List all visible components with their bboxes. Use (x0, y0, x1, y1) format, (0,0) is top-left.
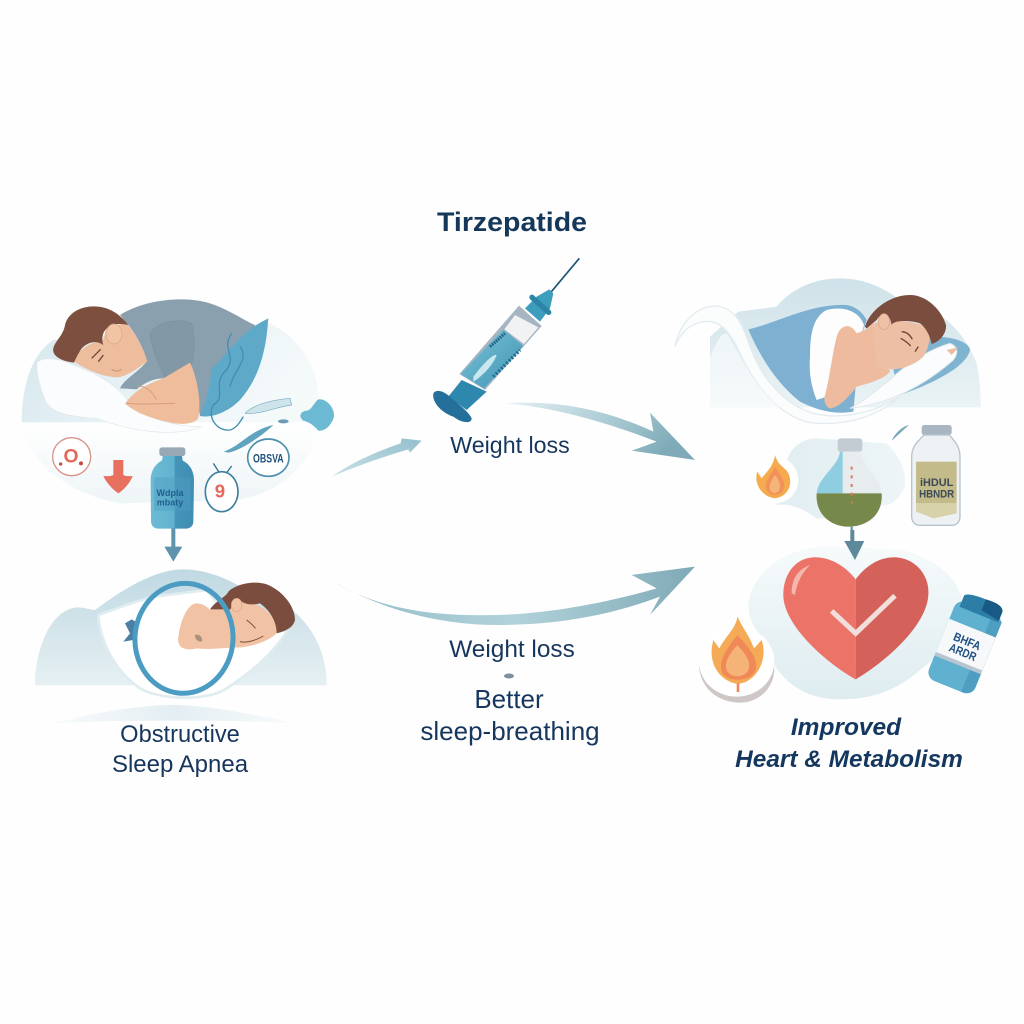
blue ring (130, 579, 238, 697)
icon: label badge: OBSVA (253, 452, 284, 466)
label: heart and metabolism: Heart & Metabolism (735, 746, 963, 773)
icon: label badge (248, 439, 289, 476)
icon: medication vial (151, 447, 194, 529)
icon: stomach gauge: 9 (215, 480, 225, 501)
panel: heart and metabolism (699, 530, 1008, 703)
icon: flame (752, 455, 798, 503)
icon: labelled bottle: HBNDR (919, 488, 954, 500)
icon: flame on disc (699, 617, 774, 703)
sleeping man, grey shirt (53, 299, 255, 424)
label: sleep-breathing: sleep-breathing (420, 716, 600, 746)
white swoosh (675, 306, 900, 424)
title: Tirzepatide (437, 207, 587, 237)
icon: low oxygen: O (63, 447, 79, 468)
icon: blue bottle (926, 589, 1008, 696)
label: better sleep-breathing: Better (474, 684, 544, 714)
icon: blue bottle: ARDR (947, 640, 979, 664)
small arrow toward weight loss (332, 438, 422, 477)
icon: blue bottle: BHFA (951, 630, 983, 653)
arrow into heart (844, 530, 864, 560)
icon: flask (817, 438, 882, 540)
white bed (98, 590, 287, 698)
hill backdrop (710, 278, 981, 407)
pillow (850, 337, 970, 408)
hill backdrop (35, 569, 327, 685)
arrow down (164, 528, 182, 562)
icon: heart (783, 557, 928, 679)
label: obstructive sleep apnea: Obstructive (120, 722, 240, 748)
label: sleep apnea: Sleep Apnea (112, 751, 249, 778)
icon: labelled bottle: iHDUL (920, 477, 954, 489)
check mark (832, 596, 895, 633)
icon: labelled bottle (912, 425, 960, 525)
loose blue blob (300, 399, 334, 431)
syringe (433, 258, 579, 422)
lower curved arrow (333, 567, 695, 625)
label: weight loss upper: Weight loss (450, 432, 570, 458)
blue blanket (748, 305, 867, 413)
panel: rested patient (675, 278, 981, 540)
label: improved: Improved (791, 714, 902, 741)
icon: medication vial: Wdpla (157, 488, 184, 498)
panel: sleeper in ring (35, 569, 327, 748)
cloud backdrop (22, 323, 318, 503)
cloud behind heart (748, 547, 962, 699)
label: weight loss lower: Weight loss (449, 636, 575, 663)
icon: stomach gauge (205, 463, 238, 512)
dot separator (504, 674, 514, 678)
panel: obstructive sleep apnea patient (22, 299, 334, 562)
icon: medication vial: mbaty (157, 497, 183, 507)
icon: low oxygen (53, 438, 91, 476)
blue blanket (200, 318, 292, 453)
person (810, 295, 958, 408)
upper curved arrow (507, 403, 695, 460)
ground shadow (53, 705, 297, 723)
icon: red down arrow (103, 460, 133, 493)
cloud behind flask (777, 438, 905, 518)
small blue swoosh (892, 425, 909, 441)
person (123, 583, 295, 649)
pillow (37, 359, 202, 432)
